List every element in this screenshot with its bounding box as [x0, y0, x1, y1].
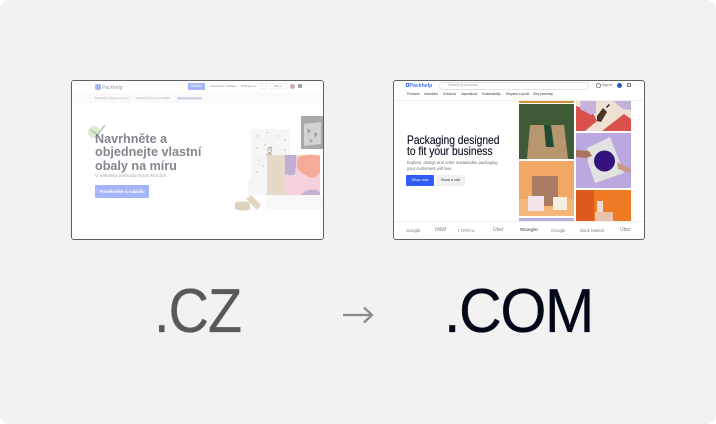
com description: your customers will love	[407, 166, 451, 171]
nav item: Products	[407, 92, 420, 96]
cz benefit 2: Doprava zdarma od 5000	[136, 96, 170, 100]
cz heading	[95, 132, 202, 172]
nav item: Why packhelp	[533, 92, 553, 96]
cz flag	[290, 84, 295, 89]
com heading: to fit your business	[407, 144, 493, 158]
com search placeholder: Search by products...	[448, 83, 480, 87]
cz button	[95, 185, 149, 198]
com description: Explore, design and order sustainable packaging	[407, 160, 498, 165]
cz nav bar	[72, 81, 323, 93]
logo: L'Oréal: L'ORÉAL	[458, 228, 475, 232]
cz benefit 3: Aktuality Packhelp	[177, 96, 202, 100]
com logo strip	[394, 221, 644, 239]
nav item: Inspirations	[461, 92, 477, 96]
cz product illustration: ka	[265, 146, 274, 155]
cz nav button: Obchod	[191, 84, 202, 88]
cz nav link: Inspirativní příklady	[210, 84, 237, 88]
logo: Google: Google	[551, 228, 566, 232]
cz nav button	[188, 83, 205, 90]
com description	[407, 160, 498, 171]
cz account icon	[261, 83, 267, 89]
cz subheading: V několika jednoduchých krocích.	[95, 174, 168, 178]
logo: Google: Google	[406, 228, 421, 232]
com primary button	[406, 175, 434, 186]
cz logo	[95, 84, 123, 90]
cz heading: Navrhněte a	[95, 132, 167, 146]
logo: H&M: H&M	[435, 227, 446, 233]
logo: Uber: Uber	[493, 227, 504, 233]
com cart	[627, 83, 631, 87]
cz heading: objednejte vlastní	[95, 145, 201, 159]
arrow	[343, 306, 374, 324]
nav item: Request a quote	[506, 92, 529, 96]
logo: Uber: Uber	[620, 227, 631, 233]
cz logo: Packhelp	[102, 84, 123, 90]
nav item: Sustainability	[482, 92, 501, 96]
com secondary button	[436, 175, 465, 186]
label: .COM: .COM	[444, 276, 593, 346]
logo: Back Market: Back Market	[580, 228, 604, 232]
nav item: Industries	[424, 92, 438, 96]
cz heading: obaly na míru	[95, 158, 177, 172]
label: .CZ: .CZ	[154, 276, 241, 346]
com search bar	[439, 82, 589, 90]
com globe icon	[596, 83, 600, 88]
cz menu: Menu	[274, 84, 282, 88]
nav item: Solutions	[443, 92, 456, 96]
com heading	[407, 132, 499, 158]
cz benefit 1: Možnosti vyberte na míru	[95, 96, 129, 100]
cz nav link: Přihlásit se	[241, 84, 256, 88]
com primary button: Shop now	[412, 178, 428, 182]
logo: Wrangler: Wrangler	[520, 226, 538, 232]
panel: .com website screenshot	[393, 80, 645, 240]
com secondary button: Book a call	[441, 178, 460, 182]
com account dot	[616, 82, 622, 88]
cz button: Prohlédněte si nabídku	[99, 189, 145, 194]
com navigation	[394, 91, 644, 101]
com photo grid	[519, 101, 631, 221]
cz cart	[298, 84, 302, 88]
cz leaf decoration	[88, 124, 106, 138]
cz sub bar	[72, 93, 323, 103]
cz menu	[270, 83, 287, 89]
cz product illustration	[235, 116, 323, 210]
panel: .cz website screenshot	[71, 80, 324, 240]
com logo: Packhelp	[410, 82, 432, 88]
com heading: Packaging designed	[407, 132, 499, 146]
com sign in: Sign in	[602, 82, 612, 86]
